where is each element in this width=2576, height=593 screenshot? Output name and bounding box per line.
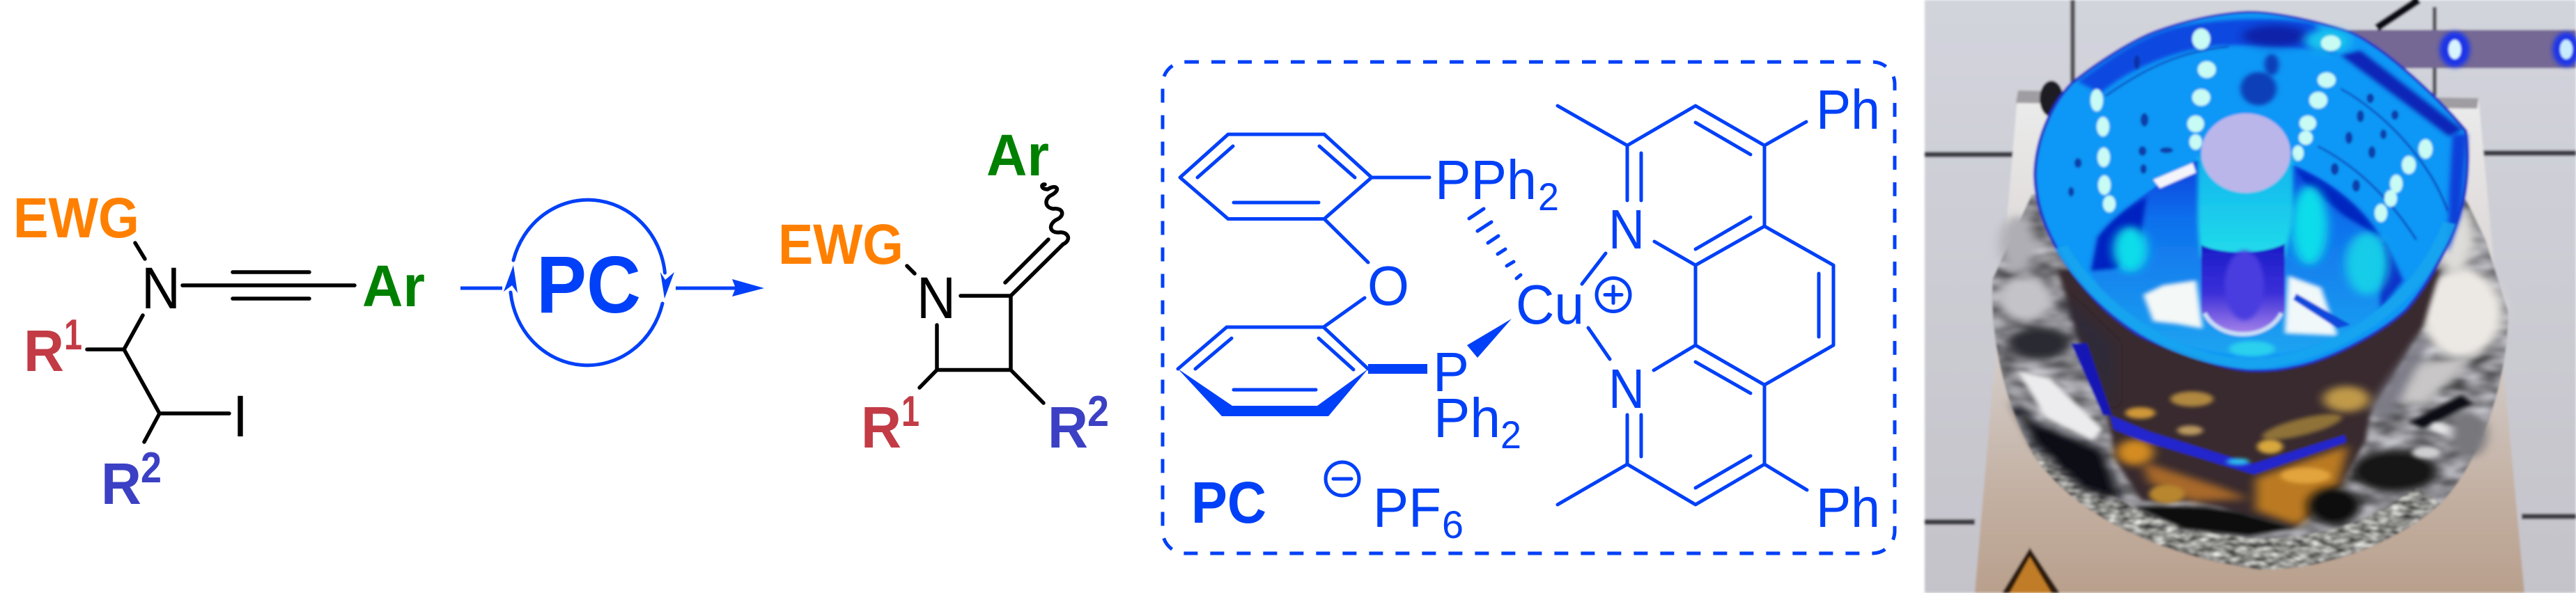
label: PC: PC <box>1191 470 1266 535</box>
label: R1: 1 <box>901 388 920 436</box>
label: Ar: Ar <box>362 253 425 319</box>
floor <box>2091 161 2403 355</box>
label: R1 <box>24 311 82 384</box>
wall marks <box>2068 55 2398 196</box>
substrate: ynamide alkyl iodide <box>13 187 425 516</box>
arrow in <box>460 287 502 290</box>
blue-lit reactor interior <box>2035 12 2467 370</box>
label: Ph2 lower: 2 <box>1500 413 1521 457</box>
label: I: I <box>233 384 248 449</box>
label: R2: R <box>1048 395 1088 460</box>
aluminium foil plate <box>1992 194 2508 569</box>
cylinder foil wall <box>2057 269 2441 536</box>
label: R2: 2 <box>1087 388 1109 436</box>
tiled background <box>1925 0 2576 593</box>
label: EWG: EWG <box>778 213 903 276</box>
label: Ph2 lower <box>1434 387 1521 457</box>
lower rim band <box>2061 223 2449 364</box>
label: Ar: Ar <box>986 122 1049 188</box>
label: R1: R <box>861 395 901 460</box>
wavy bond <box>1042 184 1068 244</box>
warning triangle <box>2002 548 2060 593</box>
label: Ph2 lower: Ph <box>1434 387 1500 449</box>
label: R1: 1 <box>64 311 82 359</box>
cycle circle <box>511 200 665 365</box>
photo: blue LED photoreactor <box>1925 0 2576 593</box>
label: R1: R <box>24 318 64 384</box>
substrate bonds <box>87 243 355 442</box>
atom labels <box>1191 79 1880 546</box>
product: azetidine <box>778 122 1109 460</box>
label: P: P <box>1433 341 1469 403</box>
panel: copper photocatalyst PC <box>1163 62 1895 553</box>
negative charge <box>1326 462 1359 496</box>
label: Ph top: Ph <box>1816 79 1880 141</box>
label: PF6 <box>1373 477 1464 546</box>
stirrer base <box>1975 90 2524 593</box>
label: PPh2: 2 <box>1538 175 1559 219</box>
cycle arrowheads <box>504 265 674 299</box>
wedge and hashed bonds to copper <box>1467 209 1610 359</box>
product bonds <box>907 239 1063 403</box>
positive charge <box>1597 278 1630 312</box>
label: R2: 2 <box>141 444 162 492</box>
label: PF6: PF <box>1373 477 1441 539</box>
label: R2 <box>101 444 162 516</box>
LED dots inside reactor <box>2090 29 2433 222</box>
label: PC: PC <box>536 239 641 330</box>
label: N: N <box>917 265 956 331</box>
dashed frame <box>1163 62 1895 553</box>
label: N bottom: N <box>1608 358 1645 420</box>
label: Ph bottom: Ph <box>1816 477 1880 539</box>
label: N: N <box>141 255 180 321</box>
label: R2: R <box>101 451 141 516</box>
label: EWG: EWG <box>13 187 139 250</box>
rim and wall <box>2035 12 2467 370</box>
label: PPh2: PPh <box>1435 149 1537 211</box>
LED strip <box>2348 0 2576 96</box>
dark rim bands <box>2078 19 2337 93</box>
vial <box>2198 113 2293 334</box>
label: R1 <box>861 388 920 460</box>
label: PF6: 6 <box>1442 503 1464 546</box>
label: R2 <box>1048 388 1109 460</box>
phosphine ligand upper ring <box>1180 134 1429 327</box>
knob <box>2040 81 2063 117</box>
label: N top: N <box>1608 198 1645 260</box>
phenanthroline ligand <box>1558 106 1833 505</box>
wall lines <box>2106 47 2448 239</box>
label: Cu: Cu <box>1516 274 1584 335</box>
arrow out <box>676 279 764 296</box>
label: O: O <box>1367 255 1409 317</box>
phosphine ligand lower ring <box>1178 327 1427 416</box>
photocatalytic cycle with PC and reaction arrow <box>460 200 764 365</box>
